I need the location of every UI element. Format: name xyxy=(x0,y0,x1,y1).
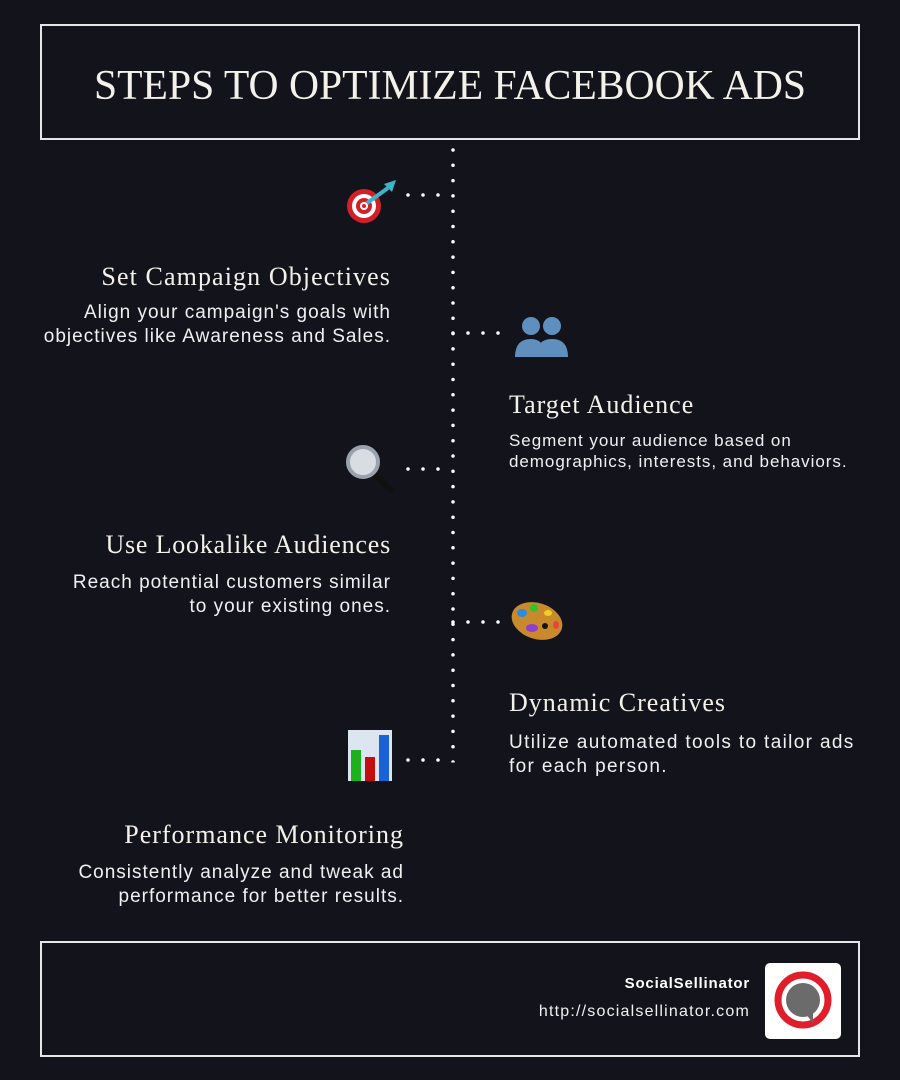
text: objectives xyxy=(44,302,391,347)
title box xyxy=(40,24,860,140)
text: performance xyxy=(78,862,404,907)
icon: people xyxy=(515,317,568,357)
brand name: SocialSellinator xyxy=(625,975,750,992)
text: performance: Consistently analyze and tweak ad xyxy=(78,862,404,883)
text: dynamic creatives: Utilize automated tools to tailor ads xyxy=(509,732,855,753)
icon: magnifier xyxy=(346,445,394,493)
heading: Use Lookalike Audiences: Use Lookalike Audiences xyxy=(105,530,391,559)
text: target audience xyxy=(509,431,848,471)
text: objectives: Align your campaign's goals with xyxy=(84,302,391,323)
text: lookalike: to your existing ones. xyxy=(189,596,391,617)
url: http://socialsellinator.com xyxy=(539,1003,750,1020)
text: objectives: objectives like Awareness and Sales. xyxy=(44,326,391,347)
logo xyxy=(765,963,841,1039)
heading: Target Audience: Target Audience xyxy=(509,390,694,419)
text: lookalike: Reach potential customers similar xyxy=(73,572,391,593)
heading: Set Campaign Objectives: Set Campaign Objectives xyxy=(101,262,391,291)
heading: Dynamic Creatives: Dynamic Creatives xyxy=(509,688,726,717)
text: dynamic creatives: for each person. xyxy=(509,756,668,777)
text: target audience: demographics, interests, and behaviors. xyxy=(509,452,848,471)
heading: Performance Monitoring: Performance Monitoring xyxy=(124,820,404,849)
title: STEPS TO OPTIMIZE FACEBOOK ADS xyxy=(94,63,806,109)
text: lookalike xyxy=(73,572,391,617)
icon: target xyxy=(347,180,396,223)
text: dynamic creatives xyxy=(509,732,855,777)
text: target audience: Segment your audience based on xyxy=(509,431,792,450)
icon: bar chart xyxy=(348,730,392,781)
footer box xyxy=(40,941,860,1057)
icon: palette xyxy=(512,602,562,640)
text: performance: performance for better results. xyxy=(118,886,404,907)
